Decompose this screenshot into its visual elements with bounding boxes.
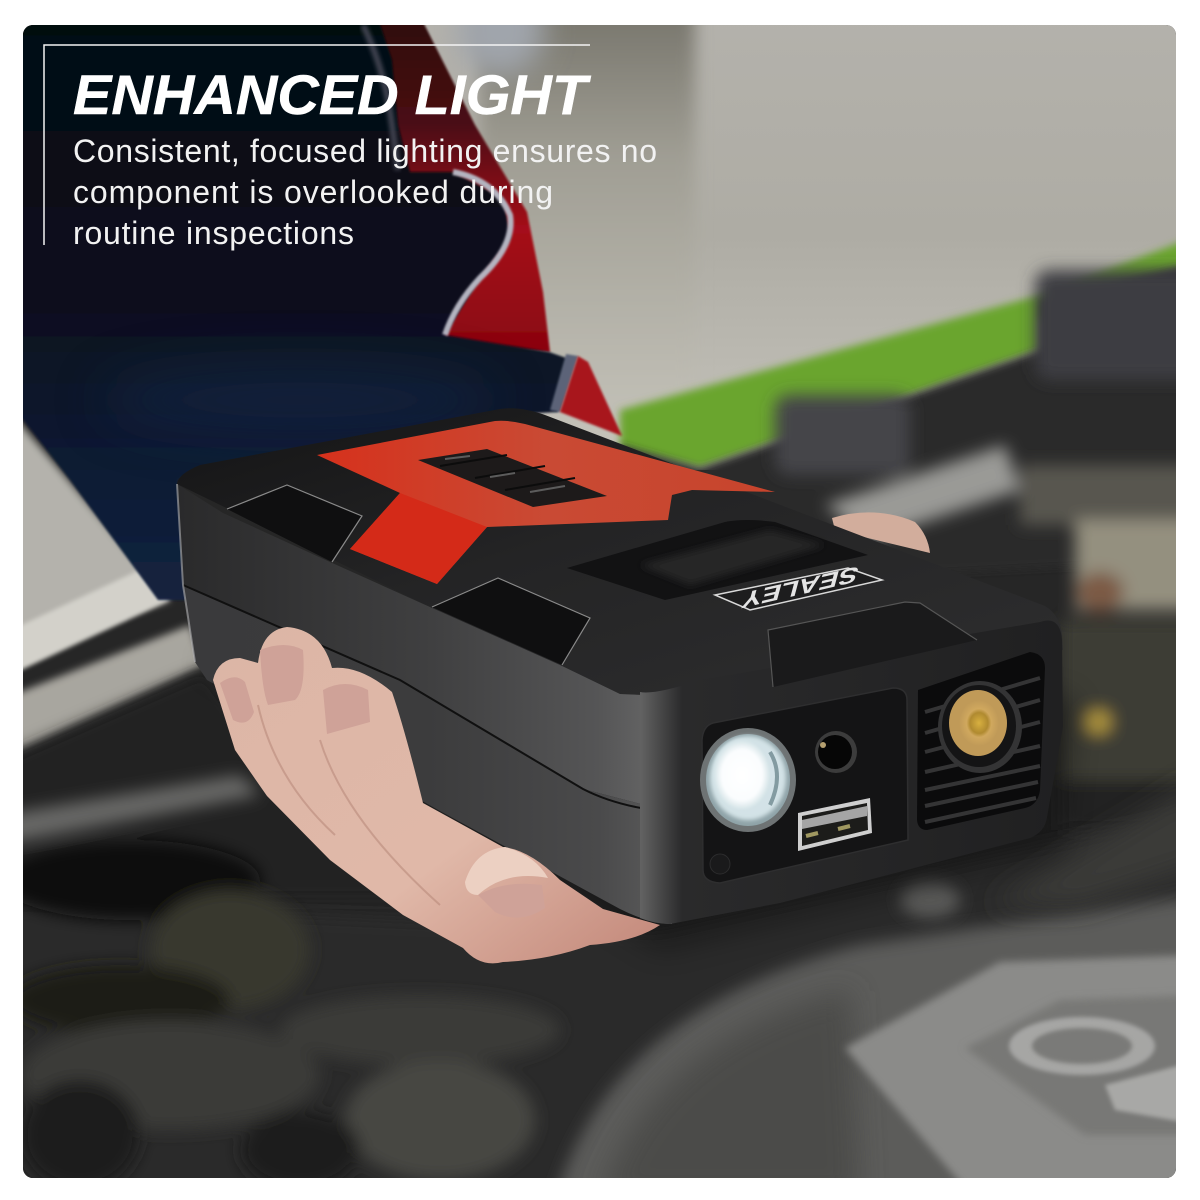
- text block: description: [73, 133, 657, 251]
- text block: description: routine inspections: [73, 215, 354, 251]
- device: top face: [177, 408, 1063, 696]
- icon: DC socket: [815, 731, 857, 773]
- hand: thumb tip: [465, 847, 548, 895]
- photo background: green wing edge: [614, 238, 1176, 470]
- text block: description: Consistent, focused lighting ensures no: [73, 133, 657, 169]
- device: red tab lower part: [350, 493, 487, 584]
- text block: description: component is overlooked during: [73, 174, 553, 210]
- icon: LED work light: [700, 728, 796, 832]
- device: brand plate: SEALEY: [739, 561, 861, 613]
- title: ENHANCED LIGHT: [73, 63, 592, 126]
- device: vent panel: [917, 652, 1045, 830]
- photo: power pack device: [177, 408, 1063, 924]
- decorative bracket: [44, 45, 590, 245]
- device: corner highlight: [177, 484, 195, 662]
- device: port panel: [702, 688, 908, 883]
- device: front face: [640, 620, 1063, 924]
- device: bumper marks: [227, 485, 977, 687]
- icon: USB port: [798, 798, 872, 851]
- photo background: engine bay: [0, 270, 1200, 1200]
- photo: device soft shadow: [489, 698, 1084, 945]
- hand: palm and fingers: [213, 627, 660, 963]
- device: lower side: [183, 585, 672, 924]
- device: display: [567, 520, 868, 600]
- icon: brass mount: [938, 681, 1022, 773]
- device: screw: [710, 854, 730, 874]
- photo: hand holding device: [213, 627, 660, 963]
- device: brand plate: [712, 567, 884, 611]
- hand: finger creases: [258, 705, 440, 905]
- photo: fingertips behind device: [832, 512, 930, 553]
- device: upper side: [177, 484, 672, 812]
- device: red top panel: [317, 421, 775, 584]
- device: seam line: [183, 585, 672, 812]
- device: control buttons: [418, 449, 607, 507]
- hand: nails: [220, 645, 512, 904]
- photo: sleeve: [0, 0, 622, 600]
